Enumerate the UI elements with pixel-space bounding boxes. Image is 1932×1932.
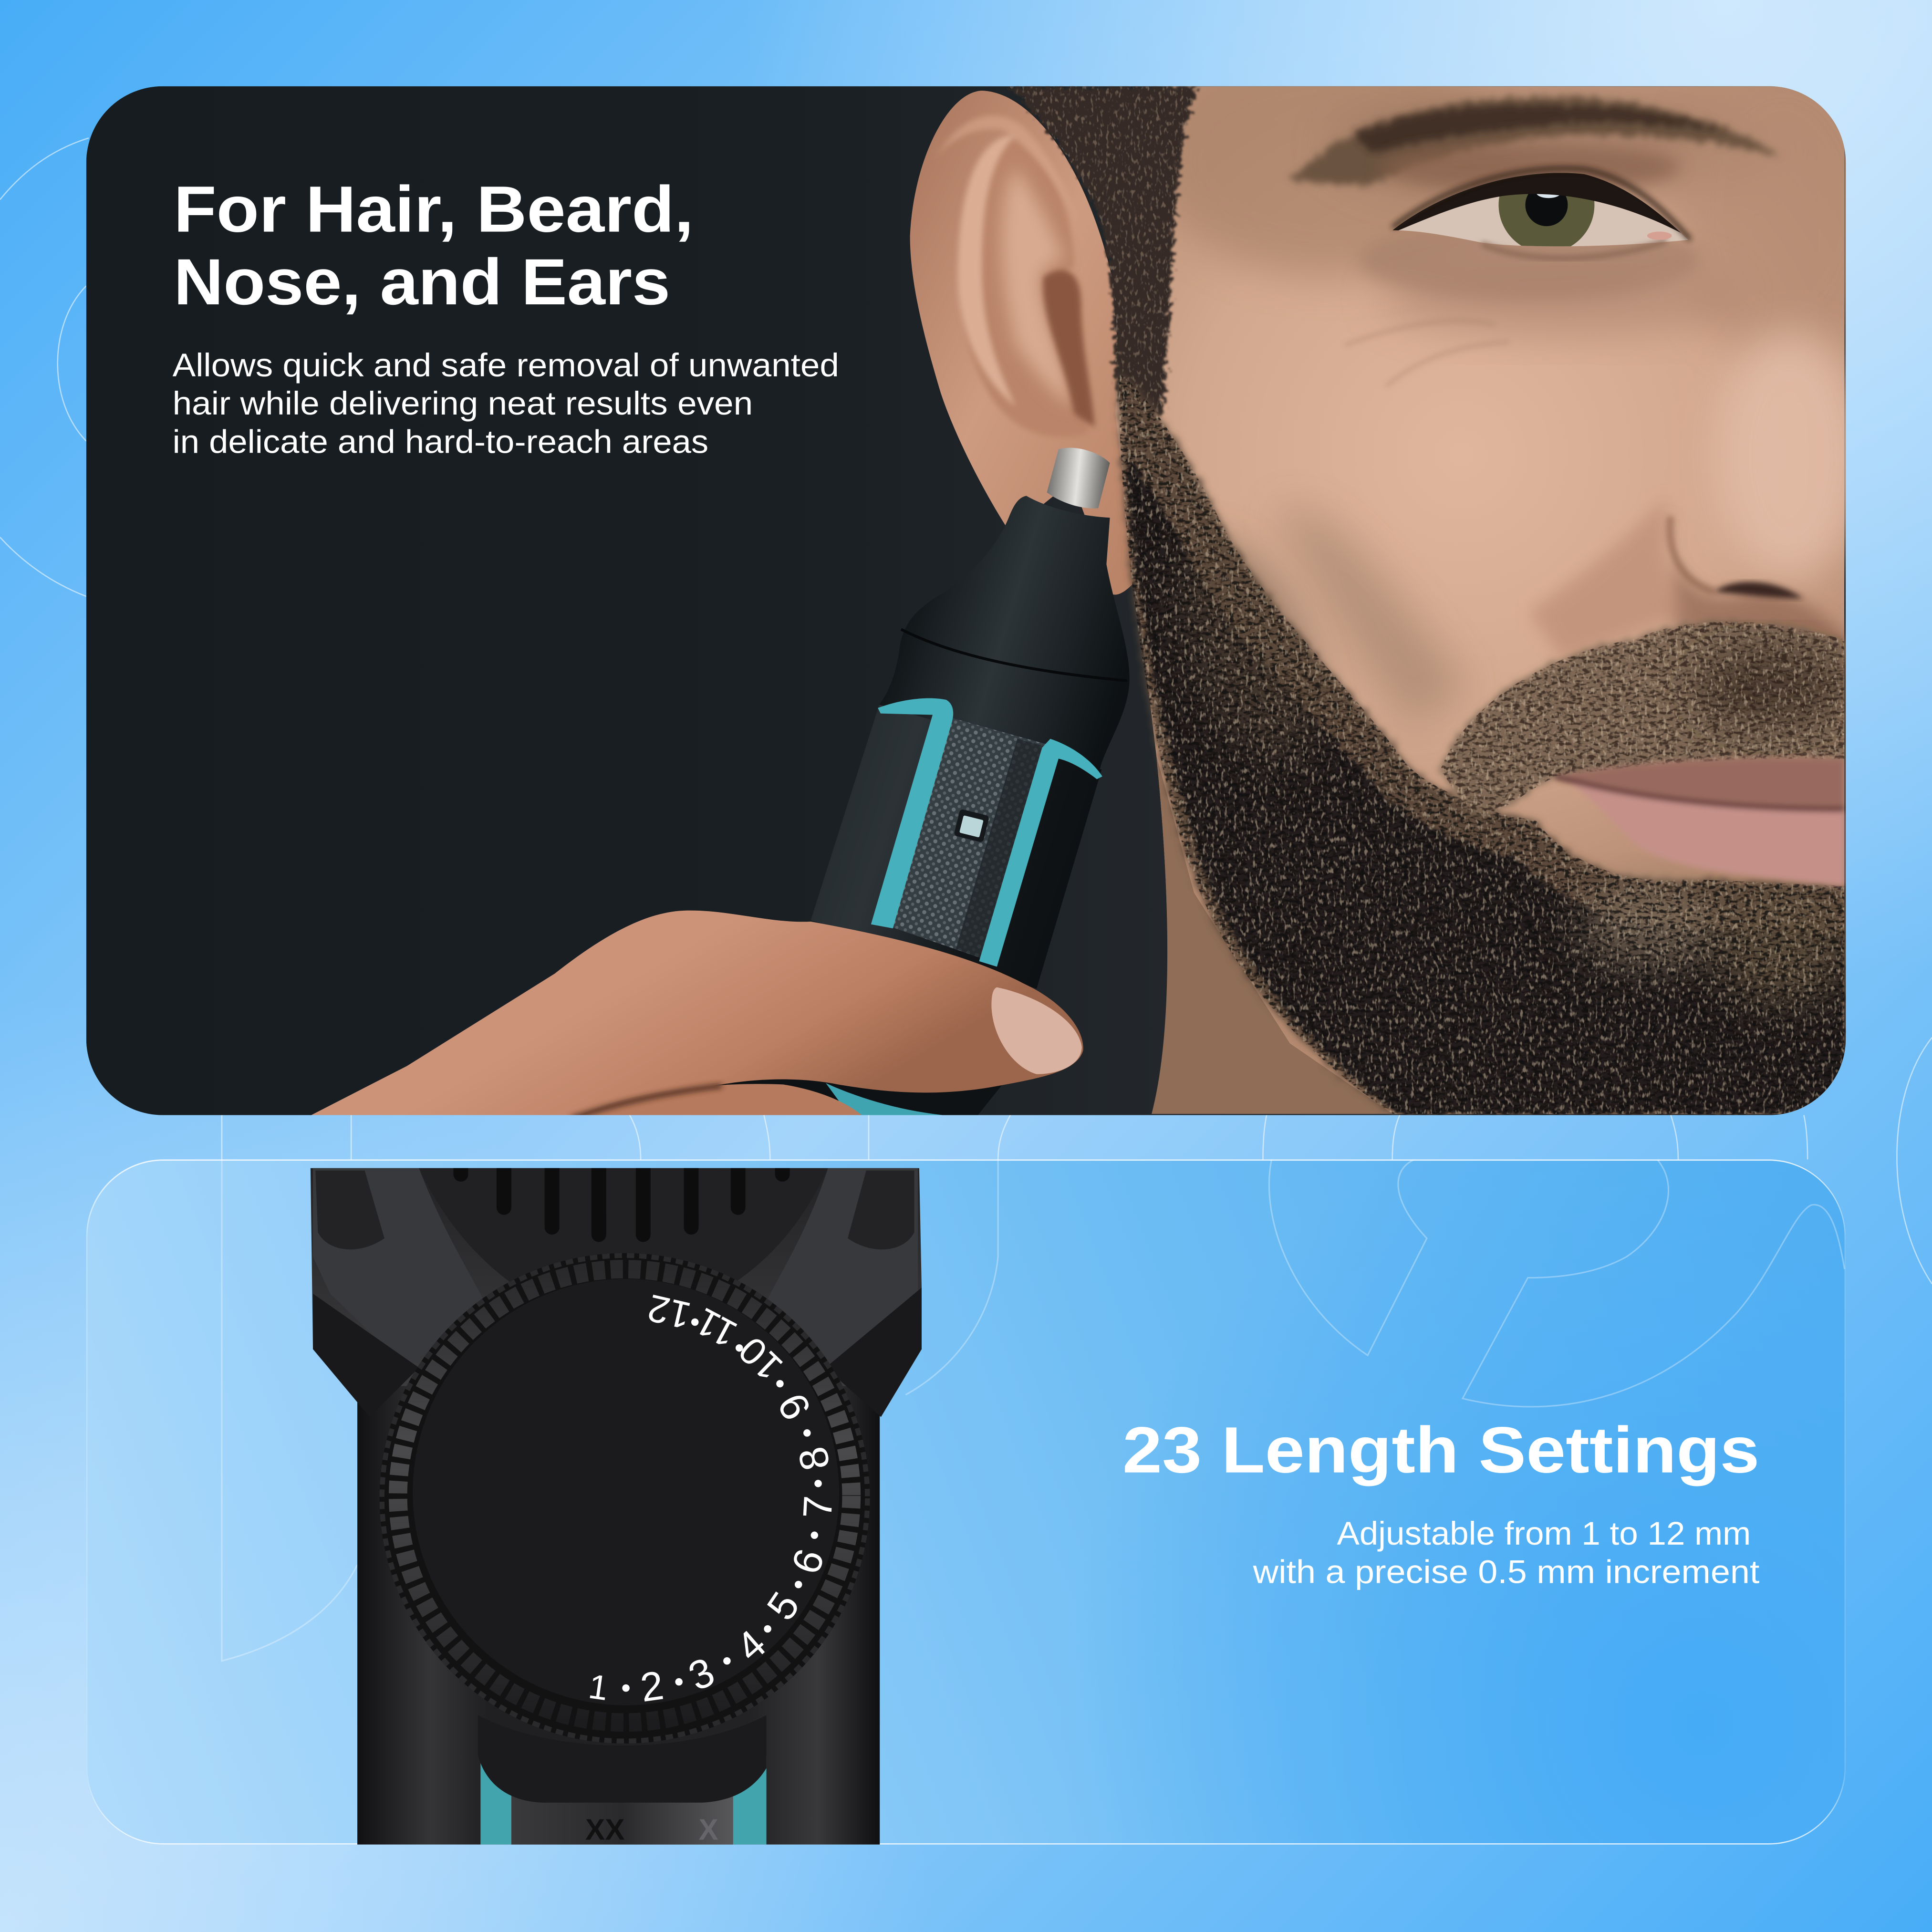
trimmer base under hand (722, 1078, 1002, 1119)
title: for hair, beard, nose, and ears: For Hair, Beard, (174, 173, 694, 246)
dial numbers: 1 (586, 1667, 611, 1708)
dial numbers (586, 1287, 841, 1711)
heading: 23 length settings: 23 Length Settings (1122, 1414, 1759, 1487)
dial numbers: 12 (644, 1287, 695, 1337)
background outline pattern (0, 138, 1932, 1284)
description text: trimmer benefits: Allows quick and safe removal of unwanted (173, 347, 839, 384)
trimmer button (954, 809, 989, 842)
beard (1119, 373, 1851, 1114)
description text: adjustable range (1253, 1515, 1759, 1590)
description text: adjustable range: Adjustable from 1 to 12 mm (1337, 1515, 1751, 1552)
grip panel with x marks: XX (585, 1813, 625, 1846)
clipper with length dial (311, 1168, 922, 1848)
moustache (1441, 622, 1844, 814)
trimmer steel tip (1047, 448, 1110, 509)
title: for hair, beard, nose, and ears (174, 173, 694, 319)
cheek stubble shading (1276, 508, 1468, 728)
description text: trimmer benefits: hair while delivering neat results even (173, 385, 753, 422)
eyebrow (1290, 96, 1783, 185)
grip panel with x marks (511, 1793, 733, 1848)
dial numbers: 11 (689, 1300, 744, 1356)
dial numbers: 2 (638, 1663, 666, 1711)
dial numbers: 8 (790, 1443, 839, 1475)
teal side panels (480, 1756, 767, 1845)
card outline pattern (222, 1160, 1845, 1661)
trimmer (811, 448, 1130, 988)
description text: trimmer benefits (173, 347, 839, 460)
lips (1556, 758, 1844, 886)
dial numbers: 3 (682, 1649, 721, 1700)
slider switch (478, 1715, 767, 1803)
clipper body (357, 1343, 880, 1848)
trimmer neck and shoulder (811, 496, 1130, 988)
trimmer teal trim (871, 698, 1102, 967)
panel: frosted length settings card (86, 1160, 1846, 1845)
eye (1358, 143, 1701, 301)
description text: adjustable range: with a precise 0.5 mm increment (1253, 1553, 1759, 1590)
dial numbers: 4 (728, 1621, 775, 1670)
trimmer body (811, 705, 1101, 988)
trimmer textured panel (892, 718, 1052, 961)
length dial (380, 1253, 870, 1744)
dial numbers: 7 (795, 1495, 841, 1519)
comb slots (461, 1168, 782, 1235)
dial numbers: 6 (783, 1543, 833, 1579)
dial number dots (622, 1319, 822, 1692)
neck (1152, 756, 1392, 1114)
title: for hair, beard, nose, and ears: Nose, and Ears (174, 246, 670, 319)
ear (910, 91, 1138, 595)
dial numbers: 10 (730, 1329, 790, 1389)
description text: trimmer benefits: in delicate and hard-to-reach areas (173, 424, 708, 460)
hand and thumb (304, 911, 1083, 1119)
face skin (1115, 86, 1844, 1114)
dial numbers: 9 (769, 1386, 820, 1427)
hair and sideburn (1009, 86, 1197, 419)
dial numbers: 5 (758, 1584, 809, 1628)
clipper head (311, 1168, 922, 1417)
thumbnail (991, 987, 1082, 1074)
grip panel with x marks: X (699, 1813, 718, 1846)
panel: nose and ear trimmer photo (86, 44, 1892, 1119)
skin shading (1153, 44, 1892, 674)
